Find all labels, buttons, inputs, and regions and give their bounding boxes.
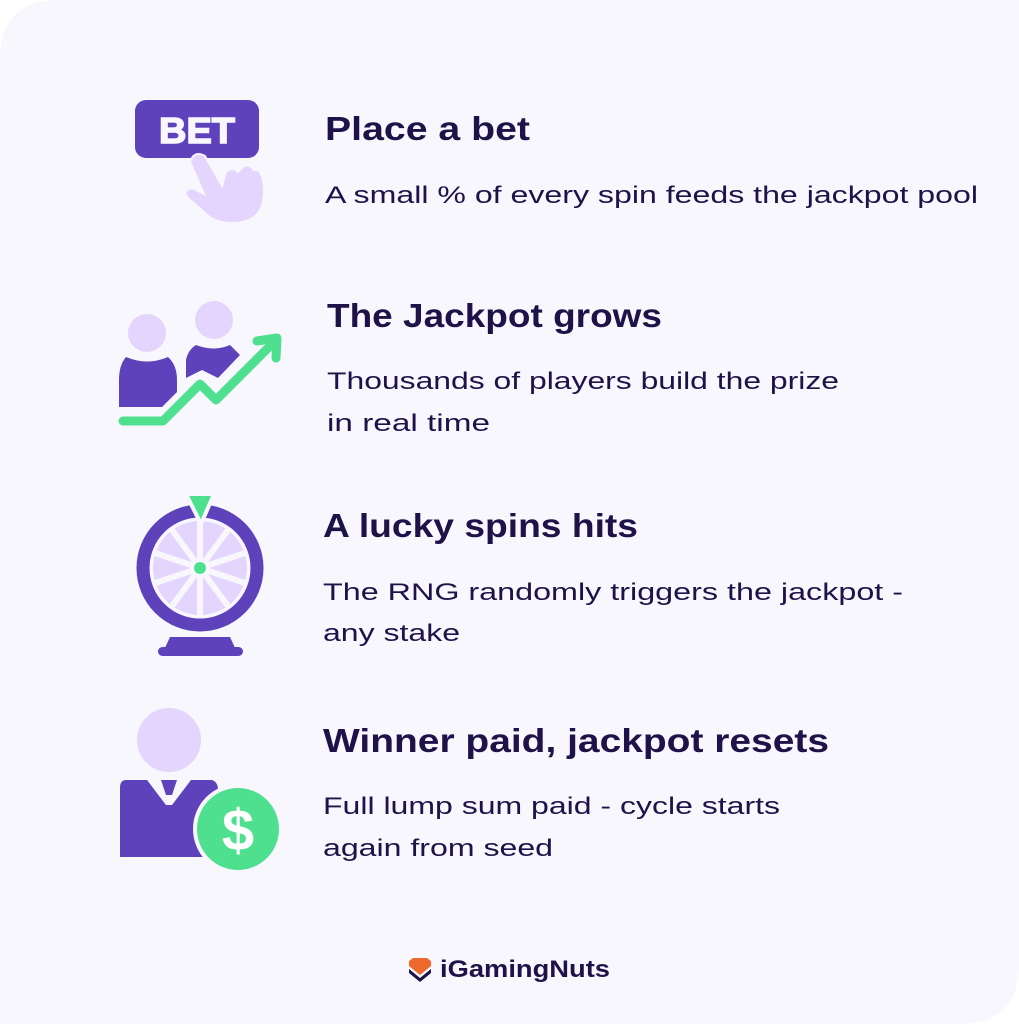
text: place a bet description: A small % of every spin feeds the jackpot pool [325, 182, 978, 209]
text: winner paid description [323, 793, 780, 862]
text: lucky spin description [323, 579, 903, 647]
heading: winner paid: Winner paid, jackpot resets [323, 722, 829, 759]
text: winner paid description: Full lump sum paid - cycle starts [323, 793, 780, 820]
text: jackpot grows description: in real time [327, 410, 490, 437]
icon: winner with dollar coin: $ [222, 798, 254, 863]
icon: bet button with hand: BET [159, 110, 235, 151]
icon: people with growth arrow [119, 301, 277, 421]
text: jackpot grows description [327, 368, 839, 437]
icon: winner with dollar coin [120, 708, 281, 872]
icon: bet button with hand [135, 100, 264, 223]
text: lucky spin description: The RNG randomly triggers the jackpot - [323, 579, 903, 606]
heading: place a bet: Place a bet [325, 110, 530, 147]
icon: prize wheel [143, 494, 257, 656]
heading: lucky spin: A lucky spins hits [323, 507, 638, 544]
text: lucky spin description: any stake [323, 620, 460, 647]
heading: jackpot grows: The Jackpot grows [327, 297, 662, 334]
text: jackpot grows description: Thousands of players build the prize [327, 368, 839, 395]
logo: iGamingNuts: iGamingNuts [440, 956, 610, 983]
text: winner paid description: again from seed [323, 835, 553, 862]
